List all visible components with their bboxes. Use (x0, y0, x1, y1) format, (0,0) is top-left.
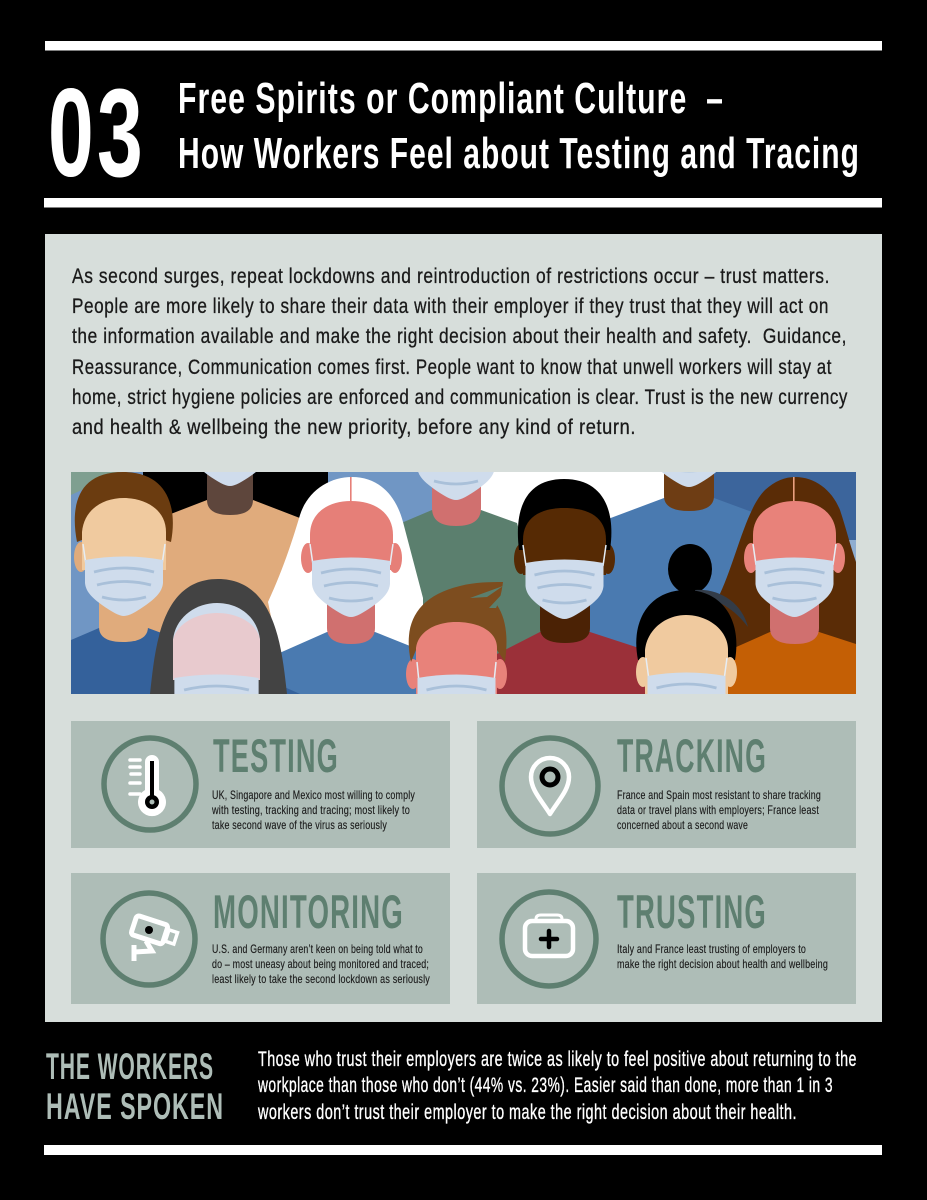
heading: tracking: TRACKING (617, 729, 767, 782)
person: woman with white hair (268, 477, 425, 694)
bottom rule (44, 1145, 882, 1155)
person: woman with bun (636, 544, 748, 694)
text: testing: with testing, tracking and tracing; most likely to (211, 803, 410, 817)
text: trusting: Italy and France least trusting of employers to (617, 942, 806, 956)
header rule (44, 198, 882, 208)
text: trusting (617, 942, 828, 971)
illustration: masked crowd (71, 472, 856, 694)
top rule (45, 41, 882, 50)
person: woman with long brown hair (717, 477, 856, 694)
text: tracking (617, 788, 821, 832)
section number: 03 (48, 64, 146, 203)
callout text (257, 1048, 857, 1124)
callout heading: HAVE SPOKEN (46, 1086, 224, 1127)
intro paragraph: and health & wellbeing the new priority, before any kind of return. (72, 416, 636, 439)
person: man with red-brown quiff (406, 582, 507, 694)
text: testing: take second wave of the virus as seriously (212, 818, 387, 832)
intro paragraph (72, 265, 848, 439)
text: tracking: France and Spain most resistant to share tracking (617, 788, 821, 802)
text: testing (211, 788, 415, 832)
panel: tracking (477, 721, 856, 848)
person: tan shirt back (148, 472, 300, 632)
panel: monitoring (71, 873, 450, 1004)
panel: trusting (477, 873, 856, 1004)
title (178, 74, 860, 178)
person: blue shirt back (590, 472, 751, 648)
text: trusting: make the right decision about health and wellbeing (617, 957, 828, 971)
text: monitoring: U.S. and Germany aren’t keen on being told what to (212, 942, 423, 956)
text: testing: UK, Singapore and Mexico most willing to comply (212, 788, 415, 802)
heading: monitoring: MONITORING (213, 885, 404, 938)
text: monitoring (212, 942, 430, 986)
person: man with brown hair, left (71, 472, 300, 694)
text: monitoring: least likely to take the second lockdown as seriously (212, 972, 430, 986)
text: tracking: concerned about a second wave (617, 818, 748, 832)
text: monitoring: do – most uneasy about being monitored and traced; (212, 957, 429, 971)
text: tracking: data or travel plans with employers; France least (617, 803, 819, 817)
person: green shirt back (403, 472, 540, 654)
main panel (45, 234, 882, 1022)
heading: trusting: TRUSTING (617, 885, 767, 938)
icon: first aid kit (502, 892, 596, 986)
icon: location pin (502, 738, 598, 834)
callout heading: THE WORKERS (46, 1046, 214, 1087)
heading: testing: TESTING (213, 729, 339, 782)
person: woman with dark grey hair, front (150, 579, 287, 694)
person: man in red shirt (495, 479, 645, 694)
icon: security camera (103, 893, 195, 985)
panel: testing (71, 721, 450, 848)
callout heading (46, 1046, 224, 1127)
icon: thermometer (104, 738, 196, 830)
